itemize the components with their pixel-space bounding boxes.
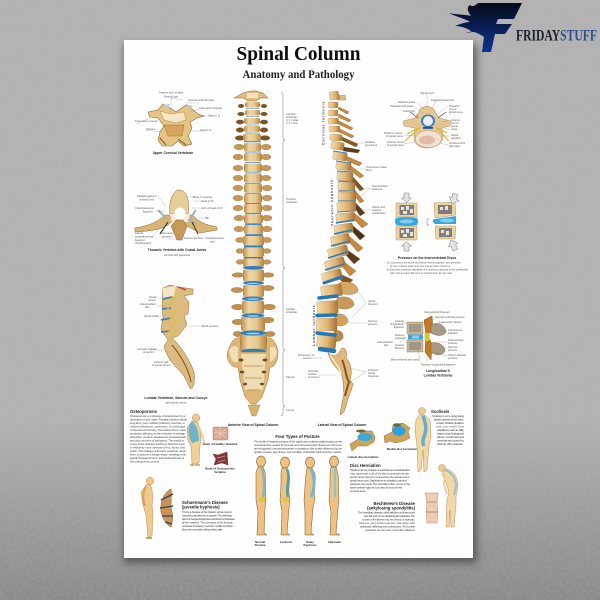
text: scoliosis description: and can result that [436,424,464,428]
panel: thoracic vertebra with costal joints [135,190,224,257]
logo: FridayStuff [449,3,597,52]
labels: lateral view [298,140,388,382]
sacrum and coccyx lateral [328,348,353,415]
text: disc herniation description: may cause part or all of the disc to protrude into the [350,472,409,476]
text: scoliosis description: lateral curvature of the spine. [434,418,464,422]
caption: osteoporotic [205,466,235,474]
caption: pressure: Pressure on the Intervertebral Discs [398,256,456,260]
text: osteoporosis description: typical "dowager's hump" and shortened body of [130,456,184,460]
captions: anterior and lateral views [228,423,366,427]
panel: lumbar vertebrae, sacrum and coccyx [137,285,219,404]
text: bechterew description: The hereditary disease, which affects men three times [358,510,416,514]
labels: lumbar: disc [145,305,150,309]
curvature labels: Lumbar lordosis [312,304,316,346]
labels: spinal cord: Epidural space [398,100,416,104]
labels: spinal cord: root of [449,107,457,111]
text: scheuermann description [182,510,235,532]
labels: lumbar: Spinal [149,295,157,299]
lumbar bodies [316,277,343,351]
labels: cervical: Axis (C 2) [200,128,212,132]
labels: longitudinal [377,310,466,366]
labels: lumbar [137,295,219,367]
labels: lateral view: foramen [368,302,378,306]
labels: thoracic: Lateral [135,231,143,235]
sacrum and coccyx [227,338,278,416]
labels: spinal cord: Spinal [451,133,459,137]
illustration: longitudinal section [407,316,446,360]
label: normal posture: Posture [255,543,266,547]
labels: lateral view: costal facet [372,211,385,215]
heading: scheuermann: (juvenile kyphosis) [182,504,220,510]
labels: lateral view: sacral [368,371,375,375]
caption: thoracic: Thoracic Vertebra with Costal Joints [148,248,206,252]
labels: lateral view: Vertebra [365,140,375,144]
panel: disc herniation images [348,423,417,459]
labels: longitudinal: Superior articular process [435,315,465,319]
labels: thoracic: Rib [205,216,209,220]
text: osteoporosis description: production affecting, as the reduction in average [130,432,185,436]
text: posture description: are recognized in structural posture or deviations, that is also influenced by the [254,446,342,450]
labels: lumbar: Auricular surface [137,347,157,351]
labels: lateral view: surface [308,372,317,376]
labels: longitudinal: pulposus [395,336,406,340]
labels: longitudinal: ligament [448,331,458,335]
text: posture description: The double S-shaped curvature of the spinal column allows weight bearing on the [254,440,342,444]
labels: spinal cord: Anterior ramus [387,140,405,144]
labels: thoracic: Body of vertebra [193,195,213,199]
labels: longitudinal: Intervertebral foramen [424,310,450,314]
text: posture description [254,440,343,454]
labels: longitudinal: Ligamentum flavum [439,320,462,324]
heading: osteoporosis: Osteoporosis [130,409,158,414]
label: lordosis: Lordosis [280,540,292,544]
text: scoliosis description: vertebrae are caused by [437,438,465,442]
labels: lumbar: Anterior root [154,360,169,364]
illustration: lateral disc herniation [350,430,375,451]
text: scoliosis description: adaptations, such as, stiffly, [437,428,464,432]
subtitle: Anatomy and Pathology [242,67,354,81]
text: osteoporosis description: and only over time of symptoms. The results in [130,438,184,442]
labels: cervical: Atlas (C 1) [208,114,220,118]
text: scheuermann description: become wedge-shaped due to reinforcement between [182,517,235,521]
text: scoliosis description: deformity of the vertebrae. [437,442,463,446]
posterior elements [334,95,368,341]
labels: lateral view: Auricular [308,369,318,373]
illustration: tilted disc under pressure [427,202,456,239]
labels: cervical: Transverse process [135,119,158,123]
text: disc herniation description: cervical area. [350,489,366,493]
illustration: lumbar side view [161,285,195,389]
label: normal posture: Normal [255,540,265,544]
labels: spinal cord: spinal [451,124,458,128]
label: flat back: Flat back [328,540,341,544]
labels: lateral view: of sacrum [308,375,319,379]
labels: longitudinal: Intervertebral [448,338,464,342]
figure: osteoporotic person [187,414,204,465]
labels: longitudinal: fibrosus [395,346,405,350]
heading: scoliosis: Scoliosis [431,409,450,414]
labels: cervical: Spinous [146,127,156,131]
brackets and labels: spinal regions [281,92,299,416]
labels: thoracic: Head of rib [201,199,214,203]
labels: longitudinal: foramen [448,341,458,345]
heading: bechterew: Bechterew's Disease [374,501,416,506]
cervical vertebrae [234,91,270,142]
text: bechterew description: course of the illness may be chronic or episodic. [362,518,415,522]
labels: thoracic: joint [209,240,215,244]
caption: pressure: b) Eccentric pressure displaces the nucleus pulposus to the unaffected [387,268,469,272]
figure: sway back [304,457,315,535]
poster sheet [124,40,473,558]
labels: longitudinal: Anterior [395,319,404,323]
labels: spinal cord: of spinal nerve [387,143,404,147]
figure: kyphotic person [141,477,154,538]
brackets and labels: spinal regions: Thoracic [286,197,297,201]
labels: lateral view: Spinal [368,299,376,303]
labels: longitudinal: Posterior longitudinal ligament [421,362,456,366]
labels: lateral view: Promontory of [298,353,315,357]
chart: anterior view of spinal column [227,91,278,416]
panel: scheuermann's disease [141,477,235,538]
labels: thoracic: ligament [143,210,153,214]
illustration: healthy vertebra [213,427,228,440]
labels: spinal cord: of spinal nerve [386,134,403,138]
labels: spinal cord: Spinal cord [421,91,434,95]
panel: osteoporosis [130,409,238,474]
labels: longitudinal: process [448,348,458,352]
text: scheuermann description: Boys are most often affected than girls. [182,528,223,532]
caption: lateral herniation: Lateral disc herniation [348,455,379,459]
panel: spinal cord cross section [384,91,466,148]
text: osteoporosis description: corticosteroid therapy. Decreased bone mass [130,428,187,432]
labels: lateral view: Posterior [368,368,379,372]
labels: lateral view: sacrum [303,356,312,360]
caption: thoracic [148,248,206,257]
labels: spinal cord: Posterior [449,104,460,108]
labels: longitudinal: Basi-vertebral vein canal [391,358,420,362]
caption: osteoporotic: Body of Osteoporotic [205,466,235,470]
captions: anterior and lateral views: Anterior View of Spinal Column [228,423,278,427]
labels: lateral view: Intervertebral [372,184,388,188]
text: scoliosis description: Unseen, Scoliosis, deviations [436,421,465,425]
text: disc herniation description: Displacement or prolapse of vertebrae and vertebral discs [350,468,411,472]
text: scheuermann description: This is a disease of the thoracic spinal column [182,510,232,514]
text: scheuermann description: vertebrae increases, and their mobility is limited. [182,524,233,528]
labels: thoracic: Transverse [160,231,173,235]
labels: lumbar: Intervertebral [140,302,156,306]
labels: lateral view: Inferior and [372,205,386,209]
panel: disc herniation text [350,463,411,493]
labels: lateral view: facet [366,168,372,172]
text: disc herniation description: spinal nerve roots. Disturbances in sensation, pain and [350,478,407,482]
labels: lateral view: superior [372,208,382,212]
illustration: osteoporotic vertebra [213,452,228,465]
caption: lumbar [144,396,208,404]
labels: lumbar: Spinal nerve [144,314,159,318]
brackets and labels: spinal regions: vertebrae [286,310,298,314]
heading: scheuermann [182,500,228,510]
text: osteoporosis description: mineral deficiency, movement, or prolonged [130,424,185,428]
caption: healthy: Body of Healthy Vertebra [203,442,238,446]
illustration: medial disc herniation [384,423,410,443]
labels: spinal cord: Posterior ramus [384,131,403,135]
labels: spinal cord: Subarachnoid space [390,104,414,108]
text: disc herniation description: paralysis can result. The herniation often occurs in the [350,482,410,486]
text: scoliosis description: effects; most thoracic and [437,435,464,439]
caption: lumbar: Lumbar Vertebrae, Sacrum and Coccyx [144,396,208,400]
thoracic vertebrae [233,143,272,267]
labels: thoracic: process [162,234,172,238]
text: scoliosis description [432,414,465,446]
caption: osteoporotic: Vertebra [214,470,226,474]
text: bechterew description: Various joint inflammations (damage with [359,521,415,525]
labels: thoracic: costotransverse [135,234,154,238]
labels: spinal cord: Vertebral arch [449,141,466,145]
text: bechterew description: ankylosis), stiffening and contractures. The lumbar [360,524,415,528]
text: osteoporosis description: Osteoporosis is a disease characterized by a [130,414,185,418]
poster content [130,43,469,547]
caption: pressure: side; the annulus fibrosus is stretched on the far side [390,271,453,275]
label: sway back [303,540,317,547]
labels: cervical: Anterior arch of atlas [159,90,184,94]
text: posture description: growth process, age, illness, and condition of discs/fat, back and the muscles. [254,450,342,454]
captions: anterior and lateral views: Lateral View of Spinal Column [318,423,366,427]
brackets and labels: spinal regions: Cervical [286,112,296,116]
labels: longitudinal: longitudinal [390,322,404,326]
text: osteoporosis description: long-term, poor nutrition (Calcium), exercise, or [130,421,185,425]
text: osteoporosis description: production, occurs in development of osteoporosis [130,435,187,439]
icon: flaming F [449,3,522,52]
labels: longitudinal: Intervertebral [377,340,393,344]
labels: cervical [135,90,223,132]
curvature labels: Cervical lordosis [322,101,326,145]
caption: longitudinal [424,369,453,378]
labels: spinal cord: Arachnoid [403,109,415,113]
labels: thoracic: Costotransverse [205,236,224,240]
text: osteoporosis description: in relatively minor stresses of hip, femur, and [130,446,185,450]
panel: scoliosis [415,408,465,472]
text: bechterew description: vertebrae are the ones most often affected. [365,528,415,532]
panel: bechterew's disease [358,464,458,532]
panel: four types of posture [254,434,343,547]
illustration: normal disc under pressure [395,203,418,240]
labels: longitudinal: ligament [394,325,404,329]
label: sway back: Kyphosis [303,543,317,547]
chart: lateral view of spinal column [298,91,388,415]
title: Spinal Column [236,43,360,65]
brackets and labels: spinal regions: C 2 = axis [286,121,298,125]
labels: spinal cord: ganglion [451,136,461,140]
panel: upper cervical vertebrae [135,90,223,155]
heading: bechterew: (ankylosing spondylitis) [367,506,416,510]
labels: thoracic: Radiate ligament [137,194,157,198]
poster shadow [124,44,477,563]
labels: lateral view: process [368,322,378,326]
illustration: kyphotic spine segment [160,489,173,527]
label: sway back: Sway [306,540,314,544]
panel: longitudinal section of lumbar vertebrae [377,310,466,378]
labels: longitudinal: Interspinous [448,328,463,332]
text: scoliosis description: Scoliosis is term designating [432,414,464,418]
heading: disc herniation: Disc Herniation [350,463,381,468]
caption: thoracic: left side with ligaments [164,253,191,257]
labels: spinal cord: spinal nerve [449,110,464,114]
labels: thoracic: of head of rib [139,198,155,202]
caption: longitudinal: Lumbar Vertebrae [424,374,453,378]
illustration: atlas and axis [148,104,204,146]
lumbar vertebrae [231,266,276,353]
heading: bechterew [367,501,416,510]
labels: thoracic: Vertebral arch [135,241,152,245]
caption: pressure: a) Concentric pressure and force evenly applied: compression [387,260,462,264]
labels: cervical: Superior articular facet [188,98,214,102]
label: normal posture [255,540,266,547]
labels: thoracic: Costotransverse [135,206,154,210]
text: disc herniation description [350,468,411,493]
illustration: thoracic vertebra [135,190,217,240]
labels: lateral view: Transverse costal [366,165,387,169]
labels: lateral view: foramina [372,187,383,191]
labels: longitudinal: process [448,356,458,360]
text: bechterew description: more than women, is manifest by joint ankyloses. The [363,514,415,518]
labels: lumbar: nerves [148,298,156,302]
labels: spinal cord: (left side) [449,144,460,148]
labels: thoracic [135,194,224,245]
labels: spinal cord [384,91,466,148]
figure: normal posture [256,456,267,535]
curvature labels [312,101,334,346]
text: osteoporosis description: decrease in bone mass. Possible causes include [130,418,187,422]
labels: longitudinal: Annulus [395,343,405,347]
labels: spinal cord: nerve [451,127,458,131]
labels: cervical: Dens of axis [164,94,179,98]
labels: lumbar: of spinal nerves [152,363,171,367]
labels: spinal cord: root of [451,121,459,125]
figure: lordosis [280,457,290,535]
brackets and labels: spinal regions: vertebrae [286,115,298,119]
text: osteoporosis description: wrists. The collapse of thoracic vertebrae cause [130,449,186,453]
panel: pressure on the intervertebral discs [387,193,469,275]
labels: longitudinal: Nucleus [395,333,405,337]
text: disc herniation description: lower lumbar region but can also be found in the [350,486,402,490]
caption: pressure [387,256,469,275]
labels: lateral view: Spinous [368,319,378,323]
brackets and labels: spinal regions: Coccyx [286,408,295,412]
caption: medial herniation: Medial disc herniation [387,447,417,451]
text: bechterew description [358,510,416,532]
figure: flat back [329,456,340,535]
labels: thoracic: ligament [135,238,145,242]
brackets and labels: spinal regions: Lumbar [286,307,295,311]
text: osteoporosis description: the osteoporotic person. [130,460,160,464]
figure: scoliotic person [415,408,431,472]
text: scheuermann description: all the vertebra. The curvature of the thoracic [182,520,234,524]
labels: longitudinal: disc [384,343,389,347]
text: osteoporosis description: a very loose skeleton leading to fractures even [130,442,185,446]
labels: spinal cord: Zygapophyseal joint [431,98,454,102]
caption: longitudinal: Longitudinal S [426,369,451,373]
labels: longitudinal: Inferior articular [448,353,466,357]
text: posture description: cervical and so needed for survival, such as keeping flow; these normal curves [254,443,343,447]
labels: lateral view: prominens [365,143,378,147]
caption: pressure: of the nucleus pulposus and the annulus fibrosus [390,264,451,268]
labels: cervical: Transverse foramen [199,106,223,110]
brackets and labels: spinal regions: Sacrum [286,375,295,379]
arrows: vertical compression [402,193,412,251]
text: osteoporosis description: them to assume a wedge shape, resulting in the [130,452,186,456]
labels: thoracic: Spinous process [184,236,204,240]
text: osteoporosis description [130,414,187,464]
figure: stooped person [438,464,458,527]
illustration: vertebra with spinal cord [403,106,451,148]
labels: lumbar: Spinal process [201,324,219,328]
illustration: ankylosed vertebrae [425,493,438,523]
text: disc herniation description: spinal canal, thereby compressing the spinal cord or [350,475,410,479]
heading: scheuermann: Schuermann's Disease [182,500,228,505]
brackets and labels: spinal regions: C 1 = atlas [286,118,299,122]
cervical and thoracic bodies [321,91,356,284]
arrows: angled compression [448,193,459,251]
caption: upper cervical: Upper Cervical Vertebrae [153,151,193,155]
caption: lumbar: with spinal nerves [166,400,187,404]
brackets and labels: spinal regions: vertebrae [286,200,298,204]
labels: thoracic: Joint of head of rib [201,206,223,210]
text: scheuermann description: caused by repeated bone growth. The vertebrae [182,514,232,518]
labels: lateral view: foramina [368,374,379,378]
text: scoliosis description: shape in dogs. Aetiology and [437,432,464,436]
labels: lumbar: of sacrum [143,350,154,354]
heading: four types of posture: Four Types of Posture [275,434,320,439]
curvature labels: Thoracic kyphosis [330,179,334,226]
labels: spinal cord: Anterior [451,118,460,122]
labels: longitudinal: Spinous [448,345,458,349]
